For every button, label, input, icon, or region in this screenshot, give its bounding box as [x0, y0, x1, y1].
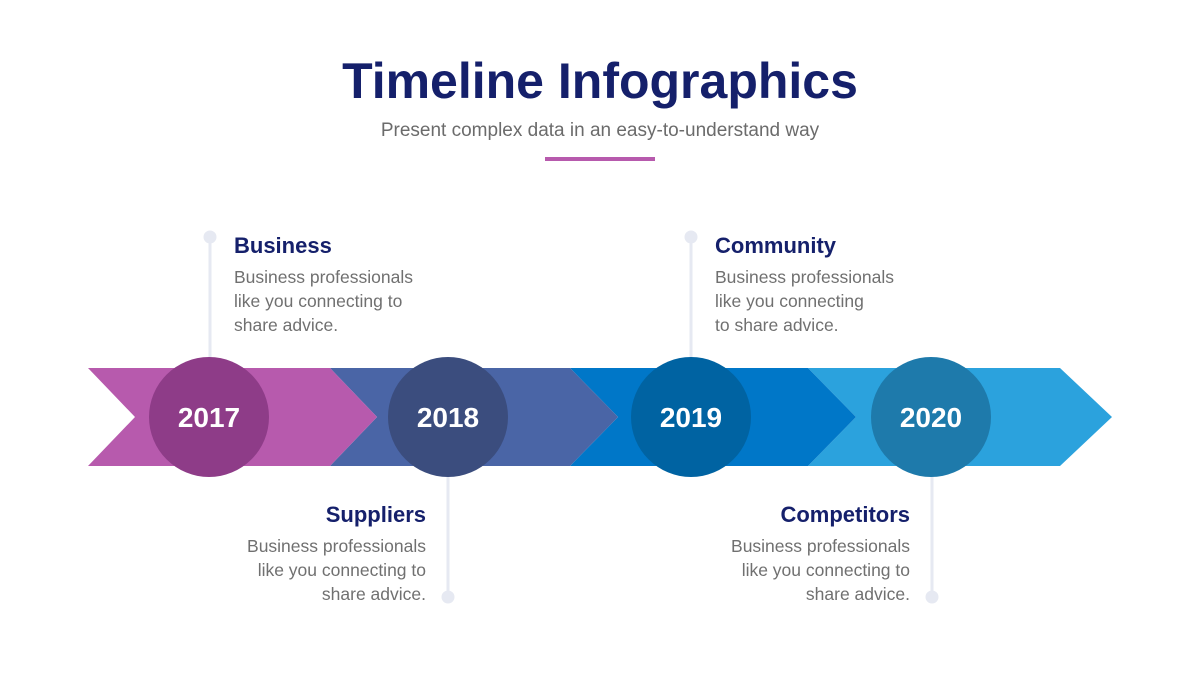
connector lines — [205, 232, 937, 602]
text: Community: Business professionals — [715, 267, 894, 287]
text: Suppliers: Suppliers — [326, 502, 426, 527]
text: Business — [234, 233, 413, 335]
text: Competitors: Competitors — [780, 502, 910, 527]
text: Community — [715, 233, 894, 335]
text: Competitors: share advice. — [806, 584, 910, 604]
text: Community: Community — [715, 233, 836, 258]
text: Competitors: like you connecting to — [742, 560, 910, 580]
text: Business: share advice. — [234, 315, 338, 335]
text: Suppliers: Business professionals — [247, 536, 426, 556]
arrow band — [88, 368, 1112, 466]
year circles: 2017 — [178, 402, 240, 433]
year circles: 2019 — [660, 402, 722, 433]
text: Business: like you connecting to — [234, 291, 402, 311]
text: Suppliers — [247, 502, 426, 604]
text: Suppliers: share advice. — [322, 584, 426, 604]
text: Community: to share advice. — [715, 315, 839, 335]
year circles: 2020 — [900, 402, 962, 433]
text: Business: Business professionals — [234, 267, 413, 287]
text: Competitors — [731, 502, 910, 604]
text: Suppliers: like you connecting to — [258, 560, 426, 580]
subtitle: Present complex data in an easy-to-understand way — [381, 120, 819, 141]
title: Timeline Infographics — [342, 53, 858, 109]
title underline — [545, 157, 655, 161]
year circles: 2018 — [417, 402, 479, 433]
text: Business: Business — [234, 233, 332, 258]
year circles — [149, 357, 991, 477]
text: Community: like you connecting — [715, 291, 864, 311]
text: Competitors: Business professionals — [731, 536, 910, 556]
